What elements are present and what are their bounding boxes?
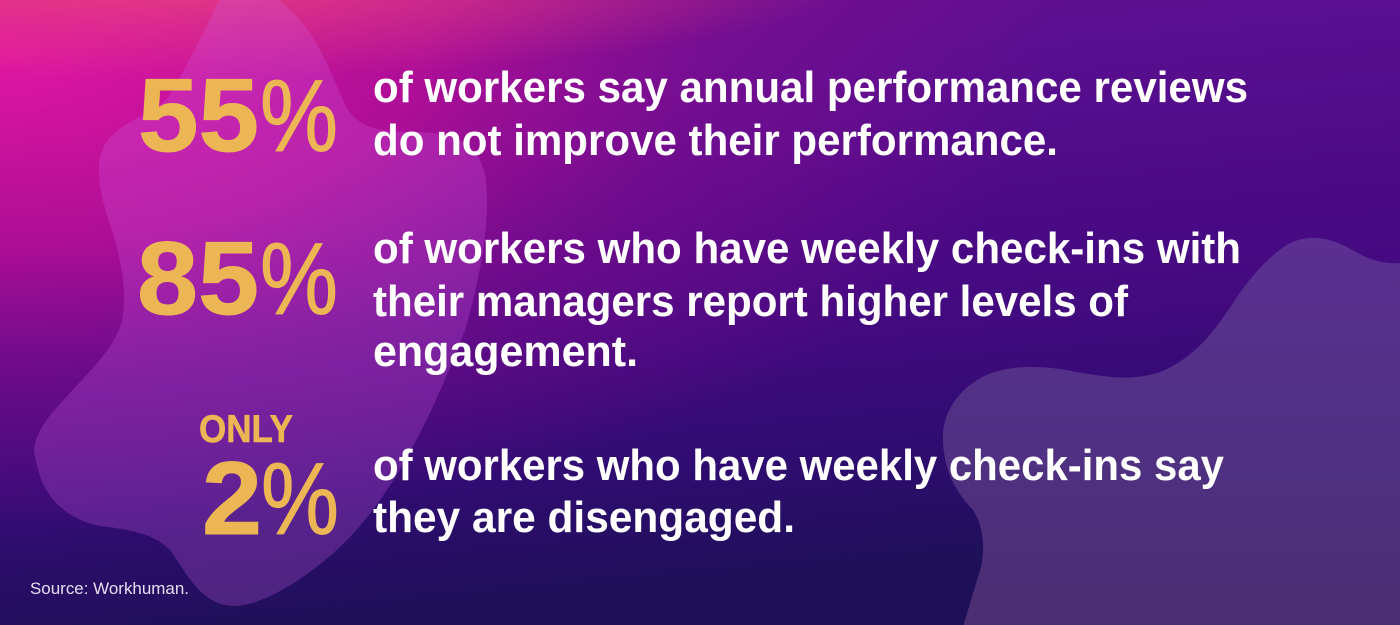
text: statement 3 [373, 441, 1224, 542]
blob: left translucent shape [34, 0, 487, 606]
stat: only 2% [199, 408, 339, 557]
stat: 85% [137, 221, 338, 337]
blob: right translucent shape [943, 238, 1400, 625]
text: statement 2: their managers report higher levels of [373, 277, 1128, 326]
text: statement 3: they are disengaged. [373, 493, 795, 542]
text: statement 2: engagement. [373, 327, 638, 376]
text: statement 2: of workers who have weekly check-ins with [373, 224, 1241, 273]
stat: 85%: 85 [137, 221, 259, 337]
stat: 85%: % [260, 222, 338, 336]
text: statement 1 [373, 63, 1248, 165]
stat: 55%: 55 [138, 58, 259, 174]
text: statement 2 [373, 224, 1241, 376]
text: statement 3: of workers who have weekly check-ins say [373, 441, 1224, 490]
stat: only 2%: % [261, 442, 339, 556]
stat: only 2%: ONLY [199, 408, 293, 451]
stat: 55% [138, 58, 338, 174]
text: statement 1: do not improve their performance. [373, 116, 1058, 165]
text: statement 1: of workers say annual performance reviews [373, 63, 1248, 112]
stat: only 2%: 2 [202, 441, 262, 557]
source note: Source: Workhuman. [30, 580, 189, 598]
stat: 55%: % [260, 59, 338, 173]
